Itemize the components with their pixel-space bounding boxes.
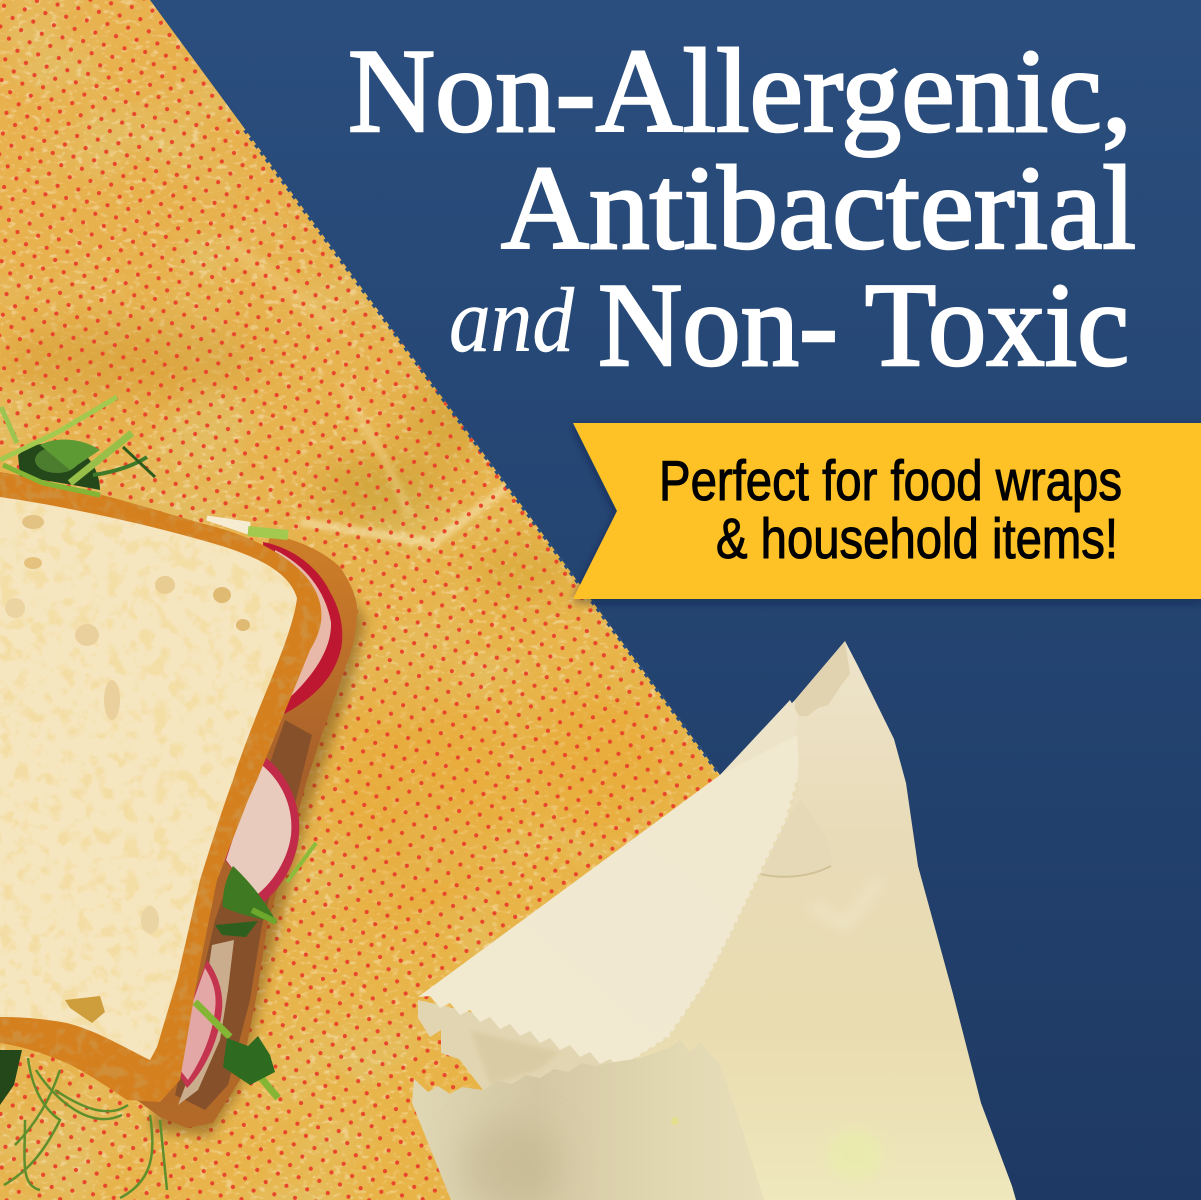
- pale filling: [178, 940, 234, 1105]
- banner text: & household items!: [716, 507, 1118, 571]
- sprout on filling: [195, 843, 316, 1098]
- radish slice middle: [225, 753, 299, 905]
- banner text: [659, 449, 1122, 571]
- title: Non-Allergenic,: [348, 24, 1132, 157]
- front bread crumb: [0, 497, 297, 1060]
- wrap yellow-green stain: [827, 1129, 883, 1181]
- wrap fold crease line: [760, 866, 831, 877]
- wrap fold dome: [764, 800, 832, 876]
- wrap upper flap: [418, 735, 798, 1068]
- wrap shade in pocket: [460, 1120, 560, 1200]
- sprout at top of sandwich: [0, 397, 288, 535]
- wrap highlight wrinkle: [812, 880, 880, 925]
- small stain: [671, 1117, 679, 1125]
- flap serration: [625, 783, 797, 1066]
- back bread slice: [130, 535, 357, 1128]
- title: Non- Toxic: [598, 258, 1129, 391]
- wrap main body: [590, 641, 1016, 1200]
- wrap inner crease: [795, 641, 850, 735]
- cream beeswax wrap bundle: [412, 641, 1016, 1200]
- title: [348, 24, 1136, 391]
- filling: [175, 720, 312, 1110]
- wrap under layer: [418, 1000, 625, 1090]
- title: Antibacterial: [501, 141, 1136, 274]
- sandwich shadow: [150, 570, 366, 1136]
- pea shoot tendrils at bottom: [0, 1050, 167, 1198]
- radish slice top: [263, 542, 342, 720]
- wrap front pocket: [412, 1040, 764, 1200]
- panel: orange dotted beeswax wrap: [0, 0, 760, 1200]
- title: and: [449, 269, 575, 371]
- banner text: Perfect for food wraps: [659, 449, 1122, 513]
- front bread crust: [0, 460, 340, 1120]
- wrap upper band: [720, 700, 799, 783]
- wrap under shade: [470, 1030, 560, 1085]
- radish slice lower: [170, 960, 222, 1088]
- banner ribbon: [573, 423, 1201, 599]
- sandwich: [0, 397, 366, 1198]
- callout banner: [573, 423, 1201, 599]
